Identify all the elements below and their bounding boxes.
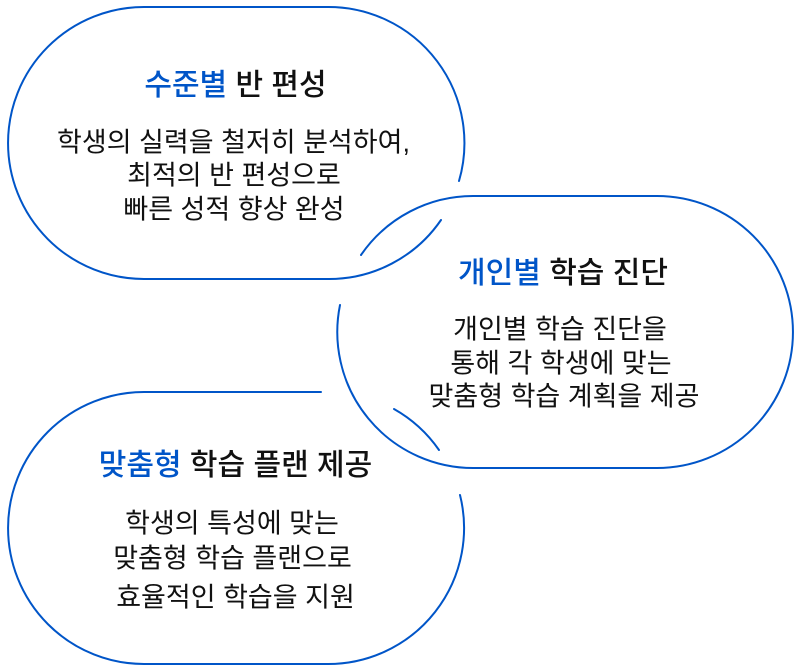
text block: level-based class placement [57, 128, 410, 224]
panel: individual learning diagnosis [337, 196, 793, 468]
pill outline: level-based class placement [8, 7, 464, 279]
pill outline: individual learning diagnosis [337, 196, 793, 468]
arc fragment: customized learning plan [394, 409, 439, 450]
panel: level-based class placement [8, 7, 464, 279]
text block: customized learning plan [113, 508, 355, 612]
text block: individual learning diagnosis: 통해 각 학생에 맞는 [450, 348, 672, 378]
pill outline: customized learning plan [8, 392, 464, 664]
text block: customized learning plan: 학생의 특성에 맞는 [125, 508, 339, 538]
text block: level-based class placement: 학생의 실력을 철저히 분석하여, [57, 128, 410, 158]
text block: level-based class placement: 빠른 성적 향상 완성 [123, 194, 345, 224]
text block: individual learning diagnosis: 개인별 학습 진단을 [453, 314, 667, 344]
heading: individual learning diagnosis: 개인별 학습 진단 [458, 257, 668, 290]
text block: level-based class placement: 최적의 반 편성으로 [127, 160, 341, 190]
heading: level-based class placement: 수준별 반 편성 [144, 69, 327, 102]
text block: individual learning diagnosis [429, 314, 699, 412]
text block: individual learning diagnosis: 맞춤형 학습 계획을 제공 [429, 382, 699, 412]
text block: customized learning plan: 맞춤형 학습 플랜으로 [113, 544, 352, 574]
heading: customized learning plan: 맞춤형 학습 플랜 제공 [99, 449, 372, 482]
panel: customized learning plan [8, 392, 464, 664]
text block: customized learning plan: 효율적인 학습을 지원 [116, 582, 355, 612]
